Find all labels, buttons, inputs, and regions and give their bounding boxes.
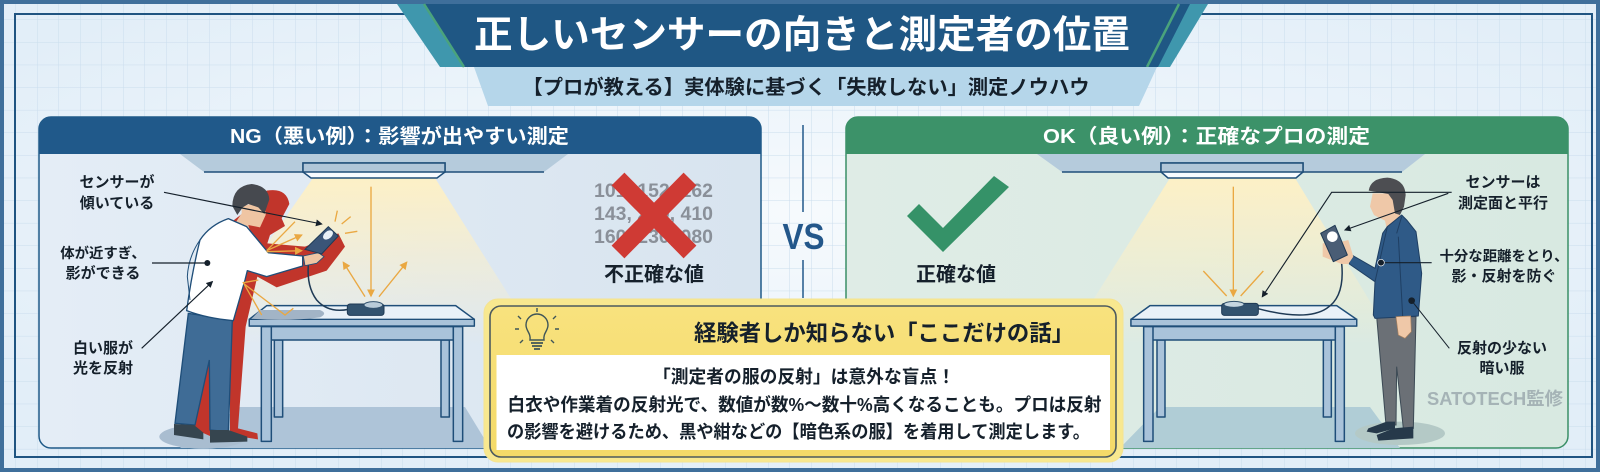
leader lines xyxy=(1262,192,1452,348)
panel: NG xyxy=(39,117,761,449)
device cord xyxy=(1257,263,1342,315)
subtitle band xyxy=(474,67,1157,106)
label: sensor tilted: センサーが xyxy=(79,174,155,191)
label: distance: 十分な距離をとり、 xyxy=(1440,247,1568,265)
scattered values: 160, 230, 080 xyxy=(594,227,713,248)
leader lines xyxy=(142,192,322,348)
label: body too close: 影ができる xyxy=(66,264,140,282)
callout body: 「測定者の服の反射」は意外な盲点！ xyxy=(653,367,955,387)
OK header bar: OK（良い例）：正確なプロの測定 xyxy=(1043,125,1370,148)
callout xyxy=(484,299,1123,462)
callout body: の影響を避けるため、黒や紺などの【暗色系の服】を着用して測定します。 xyxy=(507,421,1090,442)
NG room scene xyxy=(180,154,568,448)
inaccurate value label: 不正確な値 xyxy=(604,263,704,286)
handheld sensor xyxy=(1321,225,1347,262)
scattered values xyxy=(594,181,713,248)
title: 正しいセンサーの向きと測定者の位置 xyxy=(474,14,1130,57)
callout body: 白衣や作業着の反射光で、数値が数%〜数十%高くなることも。プロは反射 xyxy=(508,394,1102,415)
watermark: SATOTECH監修 xyxy=(1427,389,1563,409)
callout heading: 経験者しか知らない「ここだけの話」 xyxy=(694,321,1074,346)
trousers xyxy=(1377,317,1416,428)
white coat xyxy=(187,219,303,321)
shoes xyxy=(174,424,247,443)
callout body xyxy=(496,355,1110,450)
red body shadow xyxy=(193,190,345,439)
OK room scene xyxy=(1030,154,1430,448)
head xyxy=(232,184,269,231)
scattered values: 101, 152, 162 xyxy=(594,181,713,202)
NG header bar xyxy=(39,117,761,154)
sensor base xyxy=(347,302,384,315)
panel: OK xyxy=(846,117,1568,448)
label: dark clothes: 反射の少ない xyxy=(1457,340,1547,357)
label: sensor parallel: 測定面と平行 xyxy=(1458,194,1548,212)
hand xyxy=(303,253,324,266)
OK header bar xyxy=(846,117,1568,154)
accurate value label: 正確な値 xyxy=(916,263,996,286)
device cord xyxy=(308,265,348,310)
head xyxy=(1369,178,1406,228)
subtitle band: 【プロが教える】実体験に基づく「失敗しない」測定ノウハウ xyxy=(522,75,1090,99)
hand at side xyxy=(1396,316,1411,338)
title banner xyxy=(397,4,1208,67)
holding hand xyxy=(1323,240,1353,264)
icon: light bulb xyxy=(515,308,559,349)
label: body too close: 体が近すぎ、 xyxy=(60,244,146,262)
red cross xyxy=(618,179,690,252)
label: distance: 影・反射を防ぐ xyxy=(1451,267,1557,285)
VS divider: VS xyxy=(782,216,824,257)
label: dark clothes: 暗い服 xyxy=(1479,360,1525,377)
light rays xyxy=(243,187,407,315)
handheld sensor xyxy=(305,227,338,254)
label: white clothes: 光を反射 xyxy=(73,359,133,377)
shoes xyxy=(1367,422,1413,441)
label: white clothes: 白い服が xyxy=(73,340,133,357)
OK person xyxy=(1203,178,1452,445)
green check xyxy=(907,176,1009,252)
NG person with shadow xyxy=(142,184,407,449)
OK table xyxy=(1131,306,1357,441)
NG header bar: NG（悪い例）：影響が出やすい測定 xyxy=(230,124,569,148)
dark jacket xyxy=(1349,215,1422,318)
scattered values: 143, 290, 410 xyxy=(594,204,713,225)
label: sensor tilted: 傾いている xyxy=(80,195,154,212)
trousers xyxy=(175,313,232,432)
light rays xyxy=(1203,187,1263,296)
label: sensor parallel: センサーは xyxy=(1465,174,1541,191)
sensor base xyxy=(1222,301,1258,315)
NG table xyxy=(249,306,474,441)
